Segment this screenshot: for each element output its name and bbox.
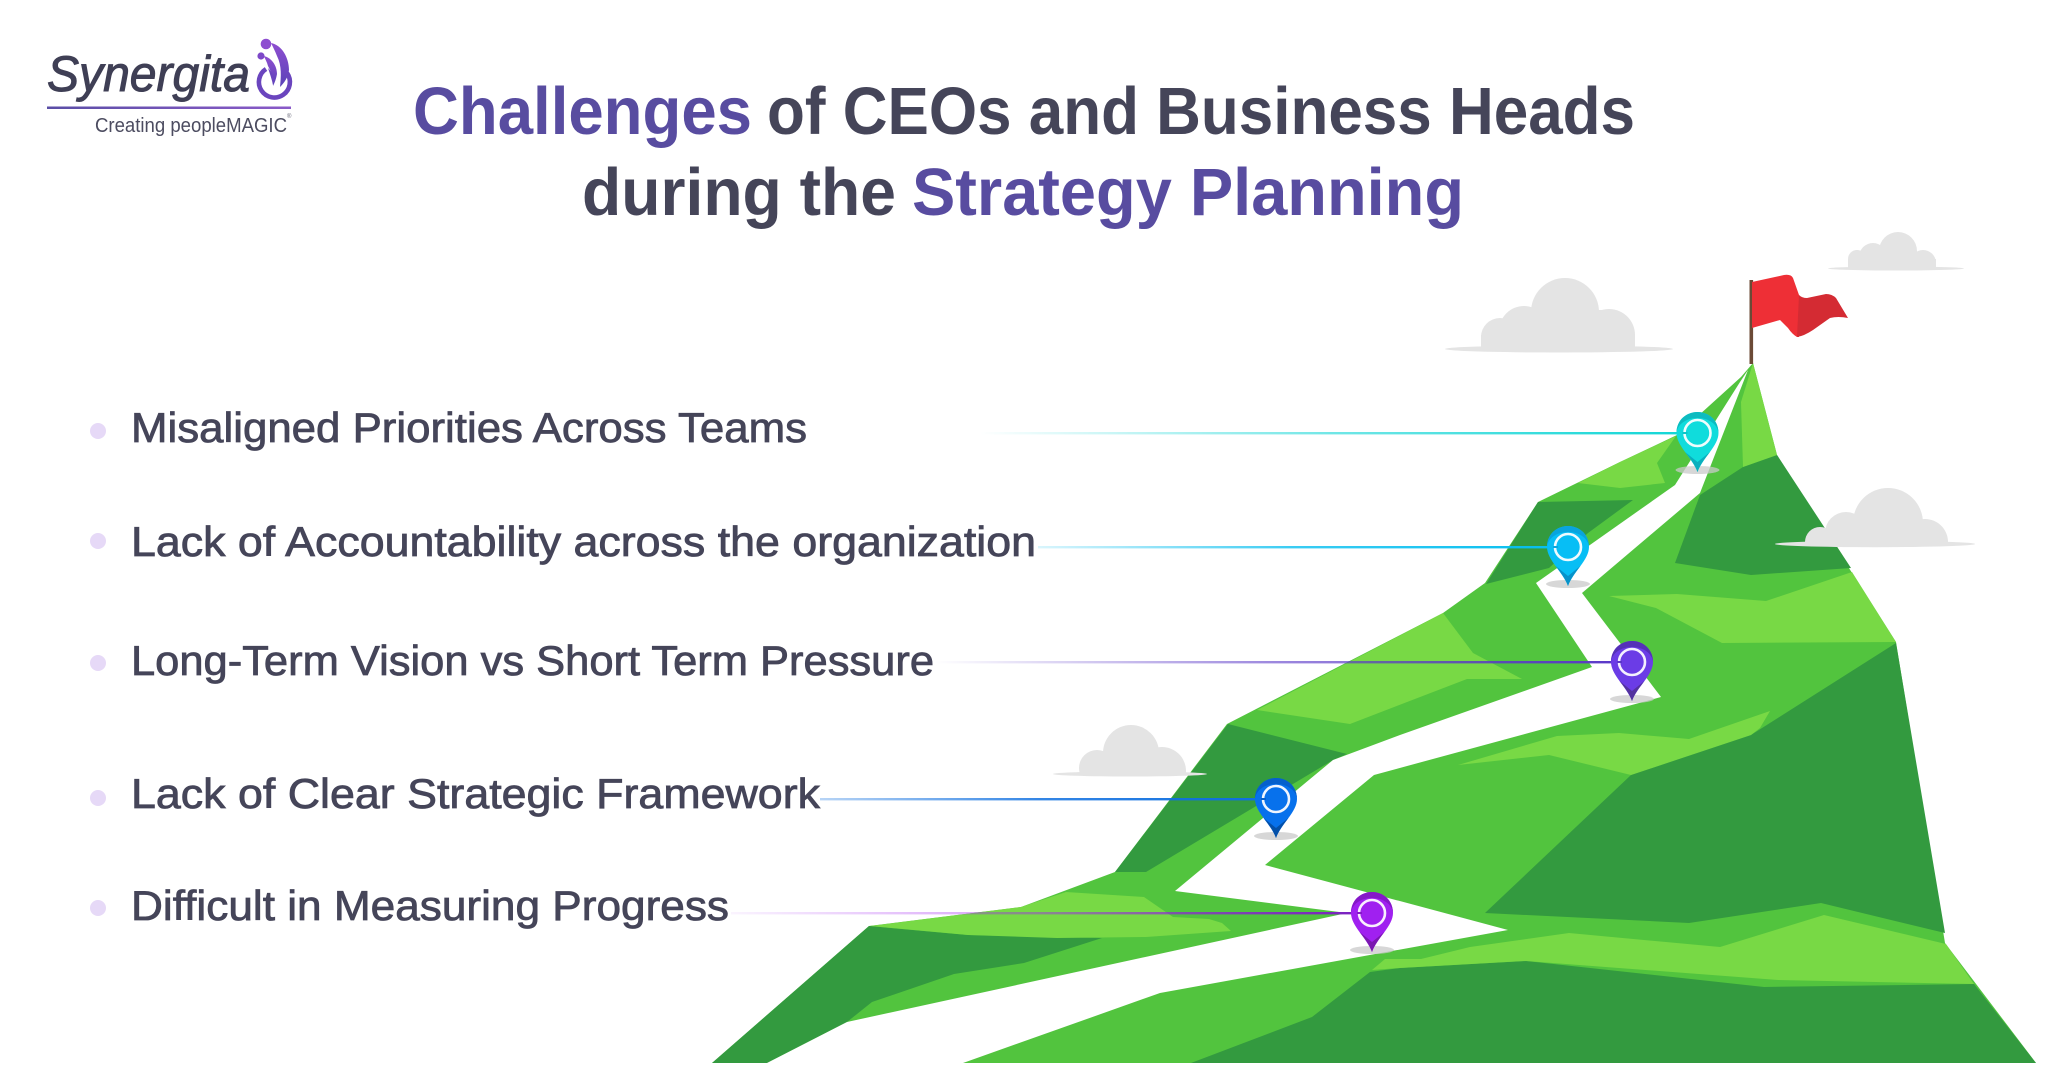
item 5: bullet and text: Difficult in Measuring Progress (131, 882, 729, 929)
item 2: bullet and text: Lack of Accountability across the organization (131, 518, 1036, 565)
cloud: left of mountain (1054, 725, 1207, 776)
pin 3: indigo (1610, 641, 1654, 703)
light facet: lower ledge (870, 892, 1231, 938)
item 4: bullet and text: Lack of Clear Strategic Framework (131, 770, 821, 817)
logo wordmark: Synergita (47, 46, 250, 102)
dark facet: bottom (1191, 961, 2036, 1063)
light facet: upper ledge (1578, 436, 1676, 488)
mountain base (712, 363, 2036, 1063)
title words: Strategy Planning: Strategy Planning (912, 155, 1464, 230)
cloud: top right (1828, 232, 1964, 270)
logo underline (47, 106, 291, 109)
logo tagline: Creating peopleMAGIC (95, 115, 287, 137)
connector line 5 (731, 912, 1353, 914)
connector line 4 (820, 798, 1257, 800)
logo: Synergita (47, 39, 292, 137)
title text: during the: during the (582, 155, 896, 230)
flag pole (1750, 280, 1753, 364)
item 1: bullet and text: Misaligned Priorities Across Teams (131, 404, 807, 451)
light facet: mid ridge (1458, 711, 1770, 775)
pin 5: violet (1350, 892, 1394, 954)
flag (1750, 275, 1848, 364)
title word: Challenges: Challenges (413, 74, 752, 149)
dark facet: lower right (1485, 643, 1945, 933)
light facet: left shoulder (1257, 613, 1522, 724)
connector line 3 (935, 661, 1615, 663)
dark facet: middle left (1115, 724, 1347, 872)
pin 2: cyan (1546, 526, 1590, 588)
connector line 2 (1038, 546, 1550, 548)
cloud: large upper (1445, 278, 1673, 352)
cloud: right of mountain (1775, 488, 1975, 548)
white winding path (767, 370, 1748, 1063)
light facet: peak (1741, 363, 1777, 467)
item 3: bullet and text: Long-Term Vision vs Short Term Pressure (131, 637, 934, 684)
registered mark: ® (287, 113, 292, 120)
flag fold (1797, 294, 1848, 337)
light facet: upper right slope (1609, 572, 1896, 643)
connector line 1 (980, 432, 1680, 434)
light facet: bottom band (1372, 915, 1974, 984)
bullet list (90, 404, 1036, 929)
pin 1: teal (1676, 412, 1720, 474)
flag cloth (1752, 275, 1799, 337)
pin 4: blue (1254, 778, 1298, 840)
dark facet: upper right (1675, 455, 1851, 575)
illustration: mountain (712, 363, 2036, 1063)
title (413, 74, 1635, 230)
dark facet: upper left (1486, 500, 1633, 584)
logo icon (257, 39, 290, 98)
title text: of CEOs and Business Heads: of CEOs and Business Heads (767, 74, 1635, 149)
dark facet: lower left (712, 926, 1102, 1063)
